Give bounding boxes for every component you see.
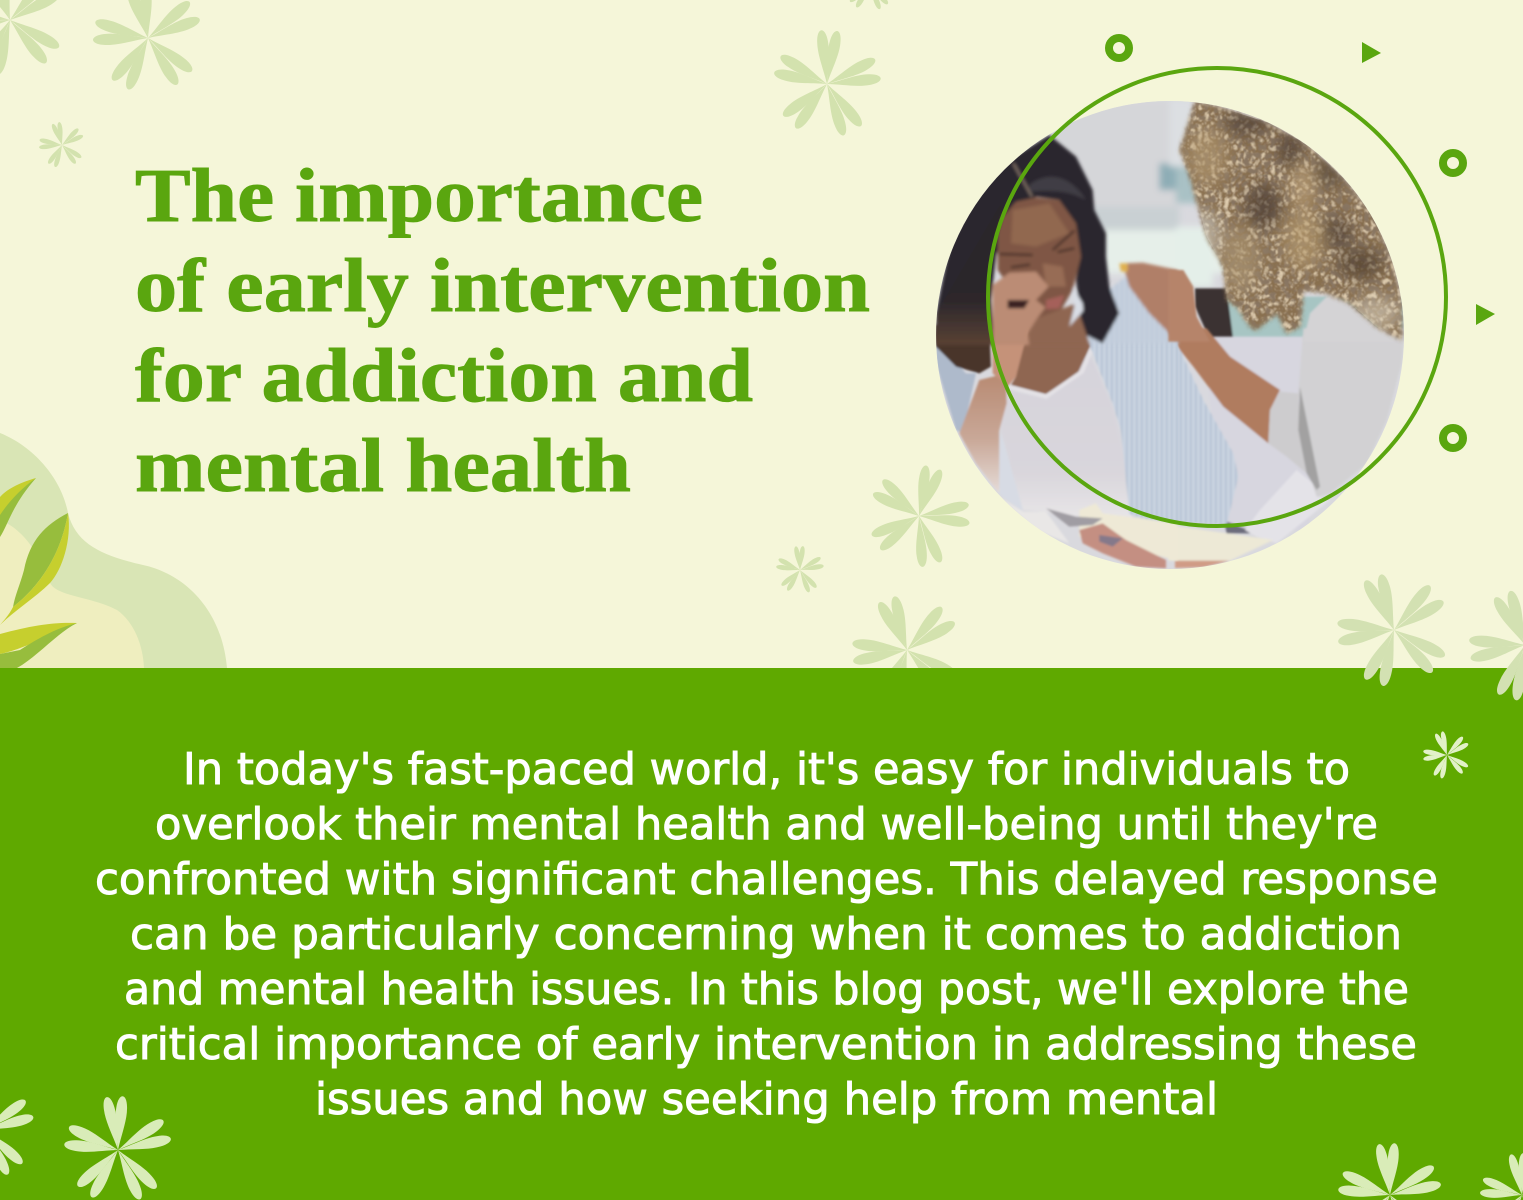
background: cream top section: [0, 0, 1523, 668]
body paragraph: confronted with significant challenges. This delayed response: [95, 854, 1438, 905]
collar: [1069, 287, 1083, 327]
title: mental health: [135, 424, 631, 508]
icon: triangle right: [1476, 304, 1495, 325]
icon: triangle top: [1362, 42, 1381, 63]
striped shirt: lower right: [1178, 348, 1238, 524]
body paragraph: and mental health issues. In this blog post, we'll explore the: [124, 964, 1409, 1015]
icon: ring right lower: [1443, 428, 1463, 448]
striped shirt: [1088, 341, 1179, 521]
title: The importance: [135, 154, 703, 238]
green ring around photo: [988, 68, 1446, 526]
flowers overlapping the panel edge and on the panel: [0, 564, 1523, 1200]
tank top: [1022, 359, 1132, 517]
body paragraph: [95, 744, 1438, 1125]
photo: two women in a counselling session: [930, 95, 1410, 575]
neckline: [1009, 348, 1092, 397]
icon: ring top: [1109, 38, 1129, 58]
hair tips: [936, 325, 991, 373]
neck: [1029, 303, 1090, 345]
left sleeve: [936, 340, 976, 433]
left woman upper half: [936, 135, 1179, 345]
right woman: forearm: [1168, 328, 1280, 443]
hand heel: [991, 343, 1025, 387]
hair: [936, 135, 1119, 343]
left woman lower half: [936, 325, 1178, 568]
notebook: right part: [1168, 525, 1273, 561]
right woman upper half: [1168, 102, 1405, 342]
face: [998, 197, 1081, 320]
hair base: [1180, 102, 1402, 340]
hand holding pen: [1079, 523, 1166, 568]
notebook: [1079, 503, 1178, 561]
leaf: middle: [0, 513, 69, 625]
icon: ring right upper: [1443, 153, 1463, 173]
eyebrows and eyes: [999, 231, 1074, 267]
body paragraph: can be particularly concerning when it comes to addiction: [130, 909, 1402, 960]
body paragraph: overlook their mental health and well-being until they're: [155, 799, 1378, 850]
hair highlight: [1029, 177, 1086, 200]
curly hair: [1180, 102, 1402, 340]
window frame and teal behind the hair: [1195, 288, 1403, 340]
sofa and right-side lower details: [1168, 328, 1405, 568]
right woman: shoulder: [1306, 296, 1378, 330]
title: of early intervention: [135, 244, 870, 328]
title: for addiction and: [135, 334, 753, 418]
hand on shoulder continued: [1168, 270, 1210, 342]
decorative blob and leaves, bottom left: [0, 433, 227, 668]
lips: [1046, 295, 1064, 309]
pen: [1046, 508, 1103, 527]
chest: [1011, 325, 1090, 394]
decorative flowers on cream: [0, 0, 987, 712]
hair tone patches: [1187, 112, 1400, 330]
shirt at shoulder: [1083, 277, 1179, 343]
body paragraph: critical importance of early intervention in addressing these: [115, 1019, 1417, 1070]
leaf: bottom: [0, 623, 77, 668]
blob: outer: [0, 433, 227, 668]
hand on shoulder: [1123, 263, 1178, 342]
body paragraph: issues and how seeking help from mental: [315, 1074, 1218, 1125]
arm: [959, 373, 1007, 493]
title: [135, 154, 870, 508]
hair parting: [1013, 163, 1032, 197]
hand at face: [993, 272, 1049, 345]
green text panel: [0, 668, 1523, 1200]
pale lower fade: [1006, 502, 1067, 542]
body paragraph: In today's fast-paced world, it's easy for individuals to: [183, 744, 1350, 795]
right woman: top: [1298, 328, 1405, 497]
leaf: top: [0, 478, 36, 537]
photo base: [930, 95, 1410, 575]
blob: inner: [0, 520, 144, 668]
room background: [1053, 104, 1224, 288]
